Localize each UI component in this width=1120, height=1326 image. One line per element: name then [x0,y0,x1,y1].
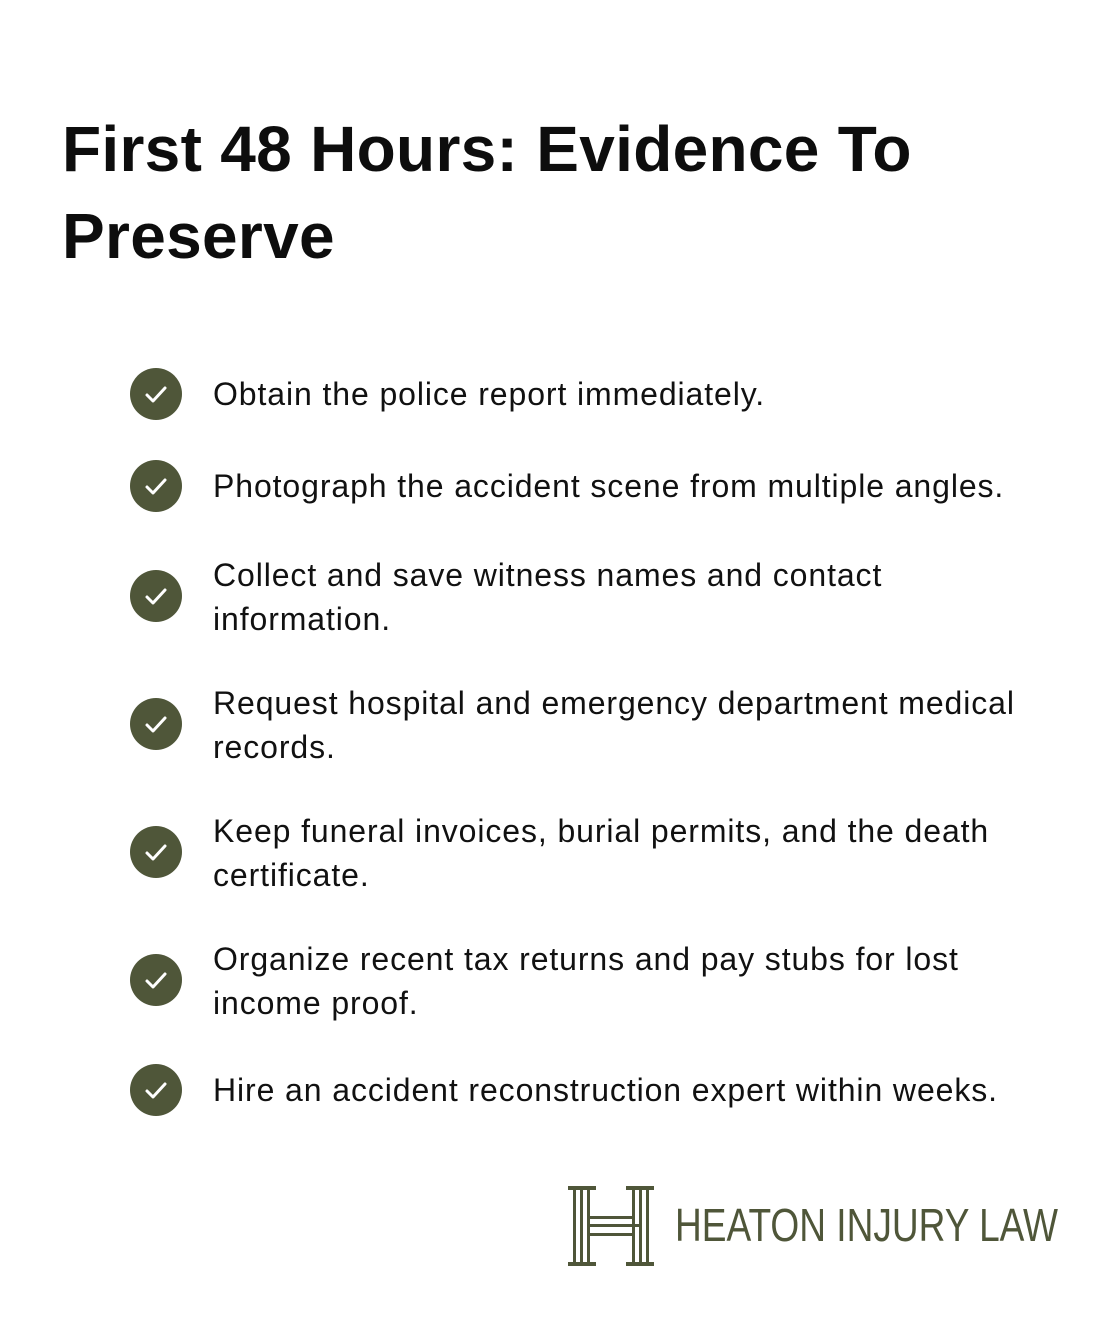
checklist item 3 [130,557,882,637]
icon: check [130,826,182,878]
checklist item 6: Organize recent tax returns and pay stubs for lost [213,941,959,977]
logo [568,1186,1058,1266]
checklist item 3: information. [213,601,391,637]
checklist item 4 [130,685,1015,765]
checklist item 1: Obtain the police report immediately. [213,376,765,412]
checklist item 5 [130,813,989,893]
checklist item 4: records. [213,729,336,765]
checklist item 1 [130,368,765,420]
checklist item 5: certificate. [213,857,370,893]
checklist item 4: Request hospital and emergency department medical [213,685,1015,721]
icon: check [130,954,182,1006]
checklist item 2: Photograph the accident scene from multiple angles. [213,468,1004,504]
checklist item 5: Keep funeral invoices, burial permits, and the death [213,813,989,849]
checklist item 2 [130,460,1004,512]
icon: check [130,460,182,512]
title: First 48 Hours: Evidence To Preserve [62,113,912,272]
icon: check [130,1064,182,1116]
checklist item 6 [130,941,959,1021]
icon: H monogram [568,1186,654,1266]
icon: check [130,368,182,420]
icon: check [130,570,182,622]
checklist item 7 [130,1064,998,1116]
checklist item 7: Hire an accident reconstruction expert within weeks. [213,1072,998,1108]
icon: check [130,698,182,750]
checklist item 3: Collect and save witness names and contact [213,557,882,593]
checklist item 6: income proof. [213,985,419,1021]
